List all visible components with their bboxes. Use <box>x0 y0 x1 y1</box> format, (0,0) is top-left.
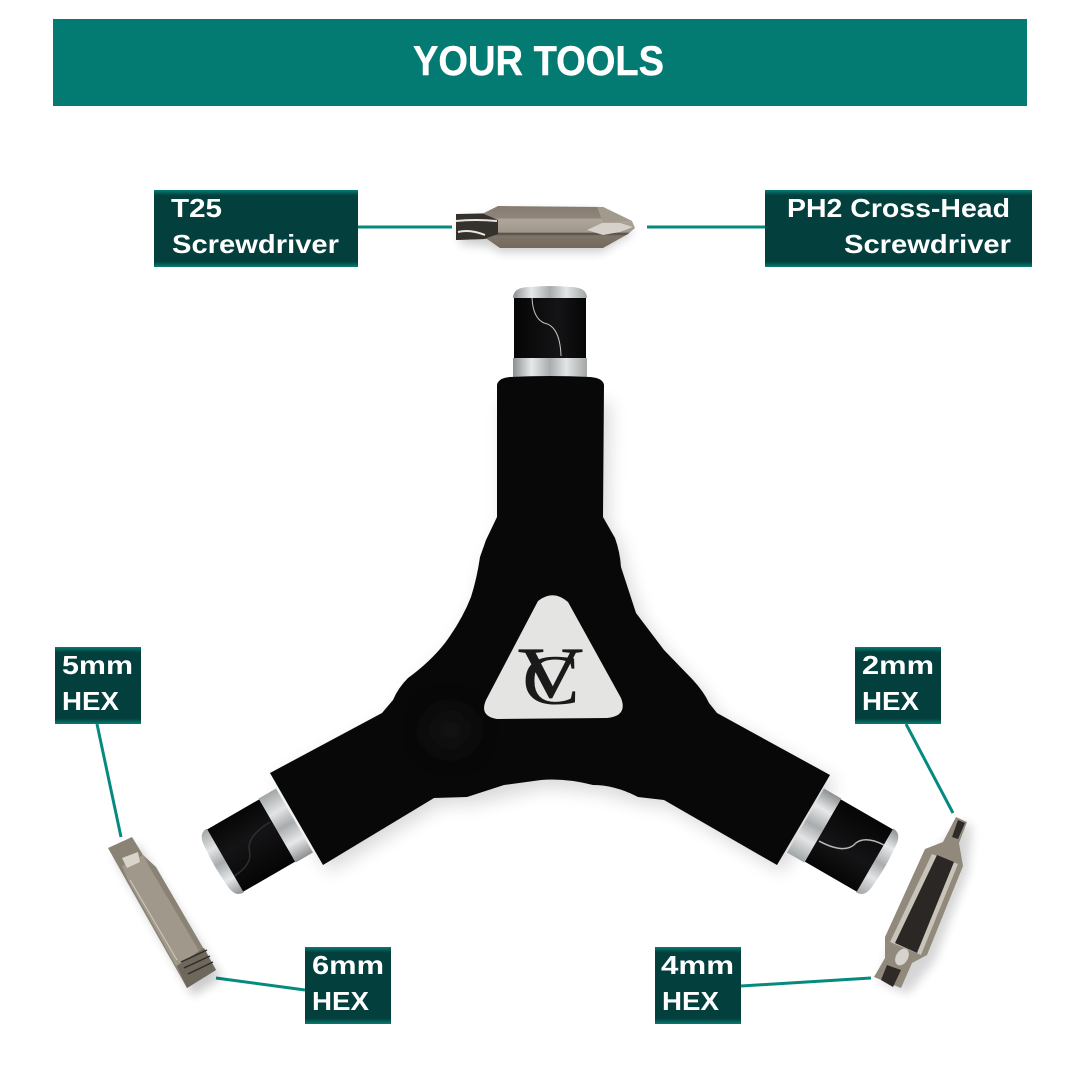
icon: 2mm / 4mm double-ended bit <box>874 817 972 994</box>
label: 2mm HEX: 2mm <box>862 650 934 680</box>
connector: T25 <box>358 226 452 228</box>
tool: Y-shaped hex wrench <box>196 286 904 899</box>
label: PH2 Cross-Head Screwdriver <box>765 190 1032 267</box>
label: 6mm HEX: 6mm <box>312 950 384 980</box>
label: T25 Screwdriver: T25 <box>171 193 222 223</box>
connector: 5mm HEX <box>97 724 121 837</box>
label: 5mm HEX: HEX <box>62 686 120 716</box>
body sheen <box>426 708 474 752</box>
label: 6mm HEX <box>305 947 391 1024</box>
label: 5mm HEX: 5mm <box>62 650 133 680</box>
connector: 6mm HEX <box>216 978 305 990</box>
label: 4mm HEX: 4mm <box>661 950 734 980</box>
label: 4mm HEX <box>655 947 741 1024</box>
tool arm socket: left <box>196 788 313 899</box>
label: 2mm HEX <box>855 647 941 724</box>
label: 4mm HEX: HEX <box>662 986 720 1016</box>
title: YOUR TOOLS <box>413 37 664 84</box>
icon: T25 / PH2 double-ended bit <box>456 206 635 252</box>
label: T25 Screwdriver: Screwdriver <box>172 229 339 259</box>
label: 5mm HEX <box>55 647 141 724</box>
connector: 4mm HEX <box>741 978 871 986</box>
icon: 5mm / 6mm double-ended bit <box>108 837 222 996</box>
tool arm socket: right <box>787 788 904 899</box>
logo badge: C <box>522 642 580 720</box>
connector: PH2 <box>647 226 765 228</box>
label: PH2 Cross-Head Screwdriver: Screwdriver <box>844 229 1011 259</box>
label: T25 Screwdriver <box>154 190 358 267</box>
tool body <box>270 376 830 865</box>
label: 2mm HEX: HEX <box>862 686 920 716</box>
logo badge <box>484 595 623 720</box>
label: PH2 Cross-Head Screwdriver: PH2 Cross-Head <box>787 193 1010 223</box>
tool arm socket: top <box>513 286 587 378</box>
connector: 2mm HEX <box>906 724 953 813</box>
label: 6mm HEX: HEX <box>312 986 370 1016</box>
logo badge: V <box>518 633 583 713</box>
header banner <box>53 19 1027 106</box>
